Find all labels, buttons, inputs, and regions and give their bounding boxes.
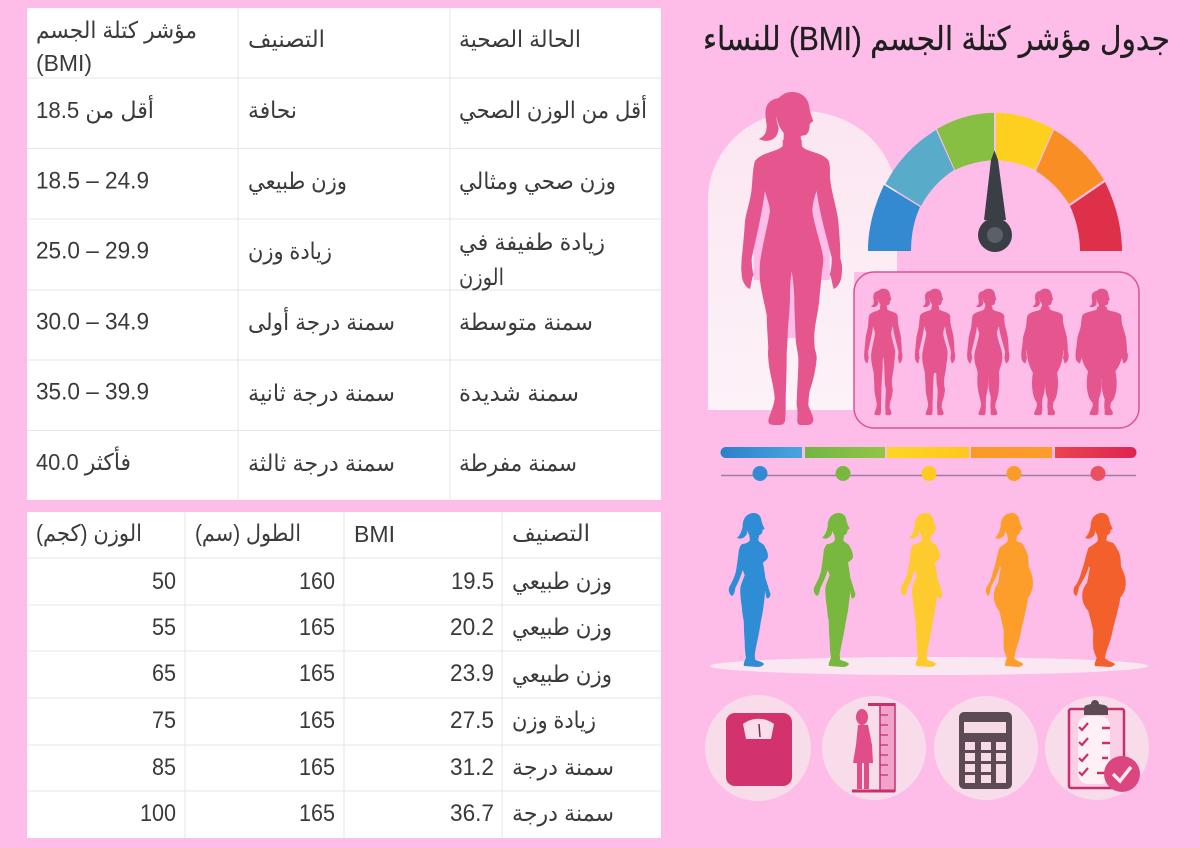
side figure: green: [814, 513, 856, 667]
row 6: 165: [299, 800, 335, 827]
row: underweight: أقل من الوزن الصحي: [459, 95, 647, 124]
icon: calculator: [934, 696, 1038, 800]
gauge segment: red: [1070, 182, 1122, 251]
row: obesity class 1: [36, 307, 593, 336]
row 5: [152, 754, 614, 781]
row 1: 50: [152, 568, 176, 595]
row: obesity class 3: [36, 446, 577, 477]
table: BMI classification: [27, 8, 661, 500]
row: underweight: [36, 95, 647, 124]
row 4: [152, 707, 596, 734]
row 3: 23.9: [450, 660, 494, 687]
row 2: 55: [152, 614, 176, 641]
row 5: 165: [299, 754, 335, 781]
row 2: 165: [299, 614, 335, 641]
small figure 5: [1075, 289, 1128, 415]
row 4: 27.5: [450, 707, 494, 734]
row: overweight: زيادة وزن: [248, 238, 332, 265]
table header row: الحالة الصحية: [459, 26, 581, 52]
gauge segment: teal: [886, 130, 954, 206]
row 6: سمنة درجة: [512, 800, 614, 827]
table header row: التصنيف: [248, 26, 325, 52]
row: obesity class 3: سمنة مفرطة: [459, 450, 577, 477]
row: normal weight: 18.5 – 24.9: [36, 168, 149, 194]
side figure: yellow: [901, 513, 942, 667]
row 2: وزن طبيعي: [512, 614, 612, 641]
row 4: زيادة وزن: [512, 707, 596, 734]
icon: checklist clipboard: [1045, 696, 1149, 800]
row 6: 100: [140, 800, 176, 827]
arch backdrop: [708, 111, 897, 410]
colour scale bar: [720, 447, 1136, 458]
row: obesity class 1: سمنة متوسطة: [459, 309, 593, 336]
side figure: red: [1073, 513, 1126, 667]
row 3: [152, 660, 612, 688]
row: overweight: [36, 229, 605, 291]
row: underweight: نحافة: [248, 97, 297, 123]
row: obesity class 2: سمنة شديدة: [459, 380, 579, 406]
row: overweight: زيادة طفيفة في: [459, 229, 605, 256]
row: normal weight: وزن طبيعي: [248, 168, 347, 195]
row 3: وزن طبيعي: [512, 661, 612, 688]
row 5: 31.2: [450, 754, 494, 781]
row: normal weight: [36, 168, 616, 195]
row 5: 85: [152, 754, 176, 781]
row: obesity class 3: فأكثر 40.0: [36, 446, 131, 476]
table header row: [36, 17, 581, 76]
large female silhouette: [741, 92, 842, 425]
scale line with dots: [721, 466, 1136, 481]
row 4: 75: [152, 707, 176, 734]
row 4: 165: [299, 707, 335, 734]
small figure 3: [967, 289, 1009, 415]
row: obesity class 2: [36, 378, 579, 407]
row 3: 65: [152, 660, 176, 687]
row 3: 165: [299, 660, 335, 687]
row 2: [152, 614, 612, 641]
row: normal weight: وزن صحي ومثالي: [459, 168, 616, 195]
row 1: 19.5: [451, 568, 494, 595]
side figure: orange: [986, 513, 1033, 667]
icon: height ruler: [822, 696, 926, 800]
row 1: [152, 568, 612, 595]
row 5: سمنة درجة: [512, 754, 614, 781]
table header row: الطول (سم): [195, 520, 301, 547]
row: obesity class 2: سمنة درجة ثانية: [248, 380, 395, 407]
row 6: [140, 800, 614, 827]
row: overweight: الوزن: [459, 264, 504, 291]
row: underweight: أقل من 18.5: [36, 95, 154, 124]
row: obesity class 2: 35.0 – 39.9: [36, 378, 149, 406]
row 1: 160: [299, 568, 335, 595]
row: obesity class 1: 30.0 – 34.9: [36, 308, 149, 336]
gauge segment: yellow: [996, 113, 1053, 170]
small figure 4: [1021, 289, 1069, 415]
row: obesity class 3: سمنة درجة ثالثة: [248, 450, 395, 477]
gauge needle: [978, 150, 1012, 252]
table header row: الوزن (كجم): [36, 520, 142, 547]
row 1: وزن طبيعي: [512, 568, 612, 595]
table header row: (BMI): [36, 50, 92, 76]
ground ellipse: [710, 657, 1148, 675]
gauge segment: green: [937, 113, 994, 170]
table header row: [36, 520, 590, 547]
panel: five body types: [854, 272, 1139, 428]
small figure 2: [915, 289, 955, 415]
gauge: [868, 113, 1122, 252]
table header row: BMI: [354, 521, 395, 547]
table header row: مؤشر كتلة الجسم: [36, 17, 197, 44]
gauge segment: blue: [868, 185, 920, 251]
row 2: 20.2: [450, 614, 494, 641]
row 6: 36.7: [450, 800, 494, 827]
title: جدول مؤشر كتلة الجسم (BMI) للنساء: [703, 20, 1170, 58]
table: height and weight examples: [27, 512, 661, 838]
small figure 1: [864, 289, 902, 415]
side figure: blue: [729, 513, 770, 667]
row: overweight: 25.0 – 29.9: [36, 238, 149, 264]
row: obesity class 1: سمنة درجة أولى: [248, 307, 395, 336]
gauge segment: orange: [1036, 130, 1104, 204]
icon: bathroom scale: [705, 695, 811, 801]
table header row: التصنيف: [512, 520, 590, 546]
